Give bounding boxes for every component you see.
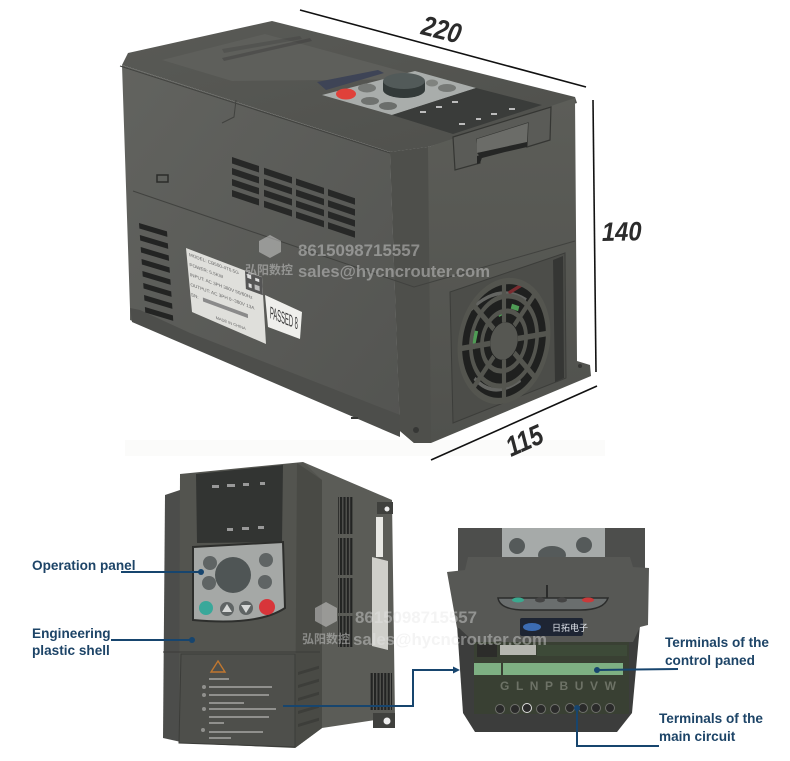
dimension: width 220 — [300, 9, 586, 87]
callout: control terminals: Terminals of the — [665, 635, 769, 650]
watermark lower: 8615098715557 — [355, 608, 477, 627]
display indicators — [212, 482, 265, 531]
callout: operation panel — [32, 558, 204, 575]
dimension: height 140: 140 — [602, 217, 642, 247]
warning triangle — [211, 661, 225, 672]
back body — [458, 528, 645, 578]
dimension: height 140 — [593, 100, 642, 372]
warning text lines — [201, 678, 276, 739]
front corner pillar — [390, 147, 431, 443]
callout: engineering plastic shell: Engineering — [32, 626, 111, 641]
callout: operation panel: Operation panel — [32, 558, 135, 573]
display window — [392, 88, 542, 134]
callout: control terminals — [594, 635, 769, 673]
brand badge — [317, 70, 384, 90]
bottom flange — [130, 308, 400, 437]
front face — [390, 98, 591, 443]
bottom corner mount holes — [351, 364, 582, 433]
lower housing — [457, 625, 640, 732]
dimension: width 220: 220 — [418, 9, 465, 50]
watermark lower: sales@hycncrouter.com — [353, 630, 547, 649]
brand badge: 日拓电子 — [552, 622, 588, 633]
rating label — [186, 248, 266, 344]
QR code — [245, 271, 263, 295]
keypad buttons — [199, 553, 275, 616]
watermark upper: sales@hycncrouter.com — [298, 262, 490, 281]
watermark upper: 弘阳数控 — [245, 262, 293, 277]
brand badge — [520, 618, 588, 636]
floor shadow — [125, 440, 605, 456]
flipped cover — [447, 557, 649, 642]
fan recess — [450, 253, 566, 423]
watermark upper — [245, 235, 490, 281]
watermark lower — [302, 602, 547, 649]
small slot — [157, 175, 168, 182]
passed sticker: PASSED 8 — [270, 302, 298, 333]
side fan slot — [553, 256, 564, 382]
arrow: cover to terminals — [283, 666, 460, 706]
cover buttons — [512, 598, 594, 602]
cover window — [498, 598, 608, 610]
front body — [179, 462, 322, 748]
callout: main circuit terminals: Terminals of the — [659, 711, 763, 726]
dimension: depth 115: 115 — [500, 418, 549, 463]
keypad buttons — [336, 80, 456, 110]
callout: control terminals: control paned — [665, 653, 755, 668]
dimension: depth 115 — [431, 386, 597, 463]
keypad fragment buttons — [509, 537, 592, 564]
callout: engineering plastic shell — [32, 626, 195, 658]
watermark upper: 8615098715557 — [298, 241, 420, 260]
product photo: inverter in perspective — [120, 21, 591, 443]
keypad — [322, 71, 476, 115]
side panel — [295, 462, 395, 748]
cover seam — [163, 651, 320, 653]
keypad — [193, 542, 285, 622]
rating label: POWER: 5.5KW — [189, 262, 224, 281]
terminal board — [474, 642, 629, 714]
lower side vent — [370, 673, 392, 710]
mounting tabs — [373, 502, 395, 728]
rating label: OUTPUT: AC 3PH 0~380V 13A — [190, 282, 255, 312]
rating label: INPUT: AC 3PH 380V 50/60Hz — [190, 272, 253, 301]
display window — [196, 465, 283, 543]
product photo: front view — [163, 462, 395, 748]
rating label: SN: — [191, 292, 199, 301]
rating label: MADE IN CHINA — [216, 315, 246, 331]
cooling fan — [458, 271, 550, 411]
right front column — [295, 463, 322, 748]
stickers — [372, 517, 388, 650]
callout: engineering plastic shell: plastic shell — [32, 643, 110, 658]
warning text on top — [222, 36, 312, 61]
side vent columns — [338, 497, 353, 647]
cover notch — [546, 585, 548, 598]
rating label: MODEL: CB500-4T5.5G — [189, 252, 239, 276]
callout: main circuit terminals: main circuit — [659, 729, 736, 744]
passed sticker — [265, 295, 302, 339]
keypad fragment — [502, 528, 605, 558]
rotary knob — [215, 557, 251, 593]
terminal door latch — [453, 107, 551, 170]
display indicators — [420, 101, 515, 125]
left vent grille — [139, 223, 173, 321]
side vent grille — [232, 157, 355, 238]
main circuit letters: G L N P B U V W — [500, 679, 617, 693]
cover seam — [120, 66, 575, 287]
watermark lower: 弘阳数控 — [302, 631, 350, 646]
left wing — [163, 490, 181, 742]
product photo: terminal view — [447, 528, 649, 732]
main screws — [496, 704, 614, 714]
top cover panel — [162, 34, 430, 81]
front louvers — [298, 666, 319, 727]
control terminals — [474, 644, 627, 675]
side face — [122, 65, 400, 430]
callout: main circuit terminals — [574, 705, 763, 746]
lower cover — [179, 654, 295, 747]
top face — [122, 21, 577, 152]
rotary knob — [383, 73, 425, 98]
